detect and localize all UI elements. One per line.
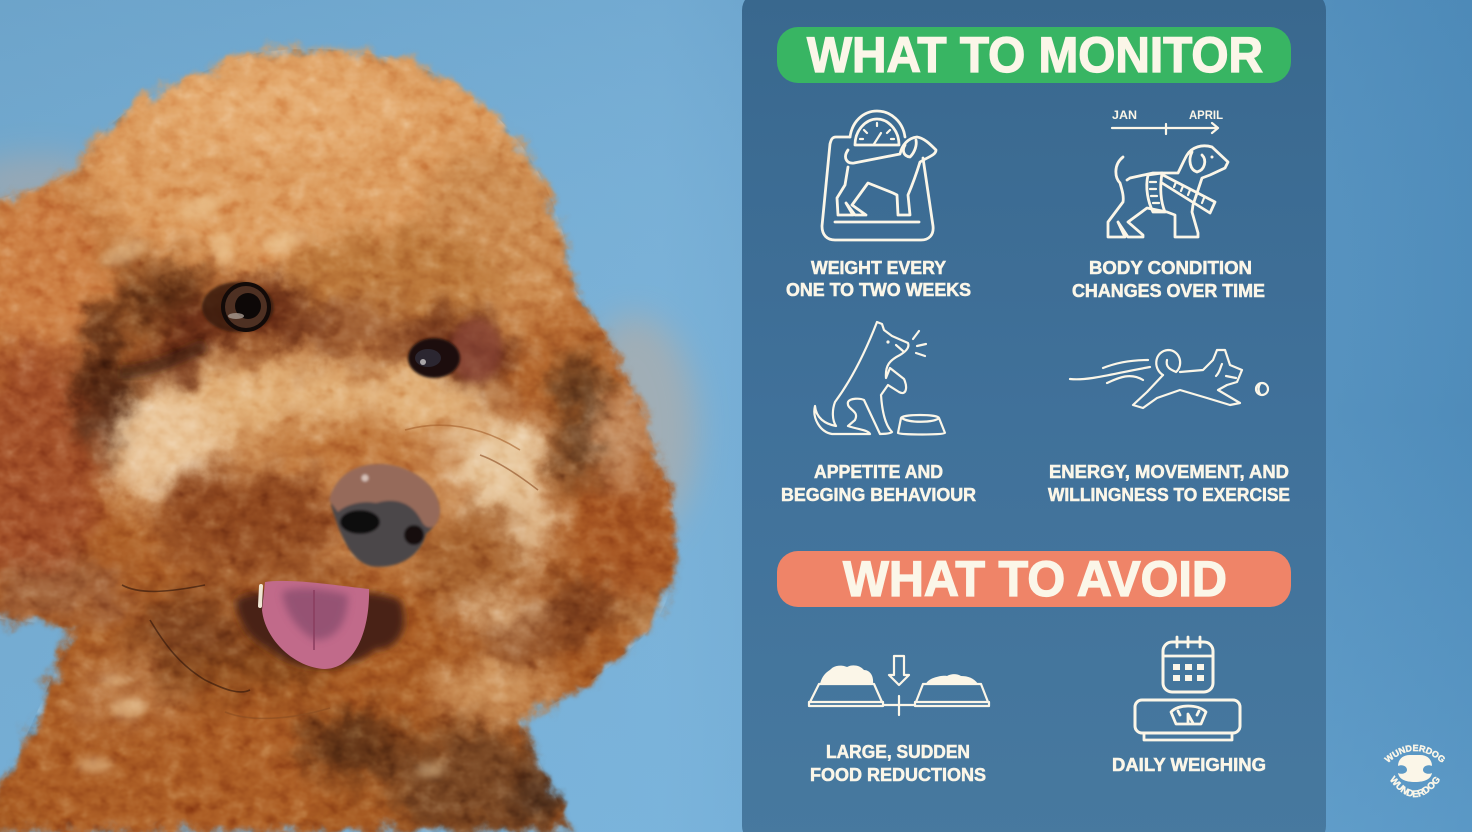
wet hair strands bbox=[122, 425, 538, 718]
label: daily weighing: DAILY WEIGHING bbox=[1112, 755, 1266, 775]
label: large sudden food reductions: LARGE, SUDDEN bbox=[826, 742, 970, 762]
label: weight: WEIGHT EVERY bbox=[811, 258, 946, 278]
label: energy: WILLINGNESS TO EXERCISE bbox=[1048, 485, 1290, 505]
nose bbox=[329, 464, 440, 567]
label: appetite: BEGGING BEHAVIOUR bbox=[781, 485, 976, 505]
logo: wunderdog bbox=[1384, 744, 1445, 798]
label: large sudden food reductions bbox=[810, 742, 986, 785]
timeline: jan to april: JAN bbox=[1112, 110, 1137, 122]
icon: sitting dog with bowl bbox=[814, 322, 945, 434]
curl highlights bbox=[77, 191, 444, 777]
label: large sudden food reductions: FOOD REDUCTIONS bbox=[810, 765, 986, 785]
eye: right bbox=[408, 338, 460, 378]
logo: wunderdog: WUNDERDOG bbox=[1390, 775, 1440, 798]
icon: dog on weighing scale bbox=[822, 111, 936, 240]
label: appetite bbox=[781, 462, 976, 505]
fur texture bbox=[0, 49, 678, 832]
mouth and tongue bbox=[235, 581, 405, 669]
panel bbox=[742, 0, 1326, 832]
icon: food bowls reduction bbox=[809, 656, 989, 715]
heading: what to monitor: WHAT TO MONITOR bbox=[807, 27, 1263, 83]
dog with tape bbox=[1108, 146, 1228, 237]
heading: what to avoid: WHAT TO AVOID bbox=[843, 551, 1227, 607]
label: energy bbox=[1048, 462, 1290, 505]
icon: running dog chasing ball bbox=[1070, 350, 1268, 408]
label: weight bbox=[786, 258, 971, 300]
label: energy: ENERGY, MOVEMENT, AND bbox=[1049, 462, 1289, 482]
eye: left bbox=[202, 282, 274, 332]
label: body condition: BODY CONDITION bbox=[1089, 258, 1252, 278]
label: weight: ONE TO TWO WEEKS bbox=[786, 280, 971, 300]
timeline: jan to april bbox=[1112, 110, 1223, 134]
timeline: jan to april: APRIL bbox=[1189, 110, 1223, 122]
icon: timeline and dog with measuring tape bbox=[1108, 110, 1228, 237]
label: body condition bbox=[1072, 258, 1265, 301]
icon: calendar and scale bbox=[1135, 637, 1240, 740]
label: body condition: CHANGES OVER TIME bbox=[1072, 281, 1265, 301]
photo: poodle bbox=[0, 49, 697, 832]
logo: wunderdog: WUNDERDOG bbox=[1384, 744, 1445, 762]
label: appetite: APPETITE AND bbox=[814, 462, 943, 482]
